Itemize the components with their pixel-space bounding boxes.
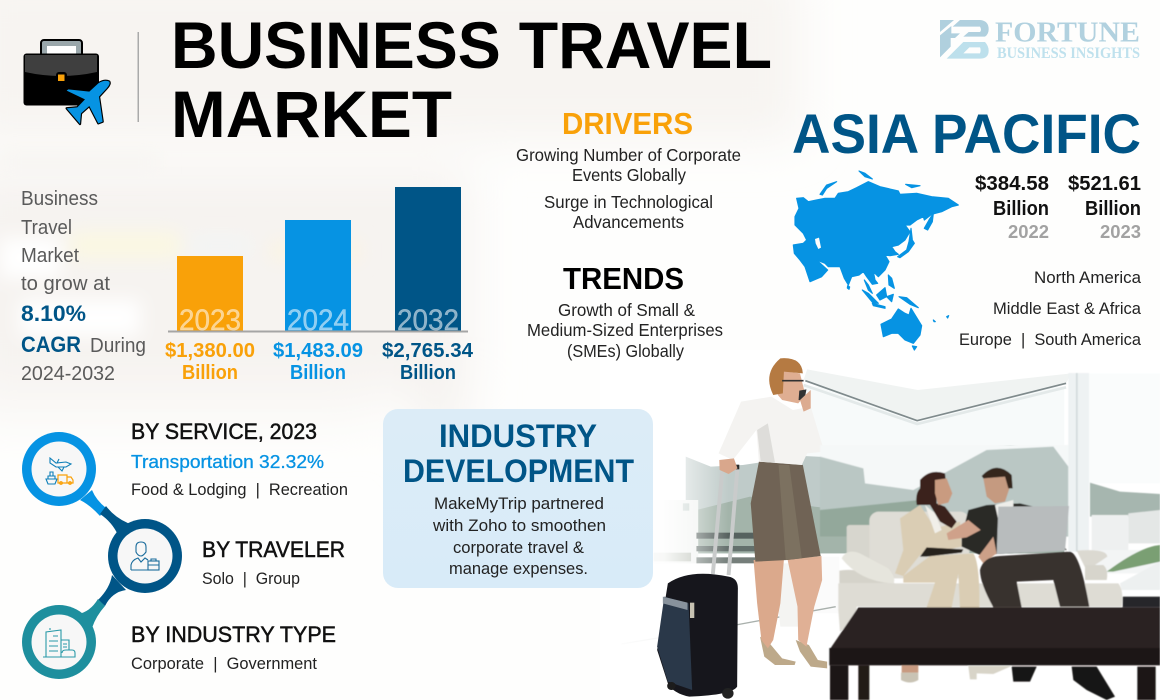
title: BUSINESS TRAVEL [171, 8, 772, 82]
stat 2022 [975, 173, 1049, 242]
icon: traveler [108, 519, 182, 593]
CAGR text block: Travel [21, 217, 72, 239]
bar chart: market size [165, 187, 474, 384]
other regions list [959, 268, 1142, 349]
heading: trends: TRENDS [563, 261, 684, 296]
segment: by service [22, 419, 348, 506]
body text: manage expenses. [449, 560, 588, 578]
photo: business travellers in a bright lounge [657, 358, 1160, 700]
driver 1 [516, 145, 741, 185]
bar 2032 [382, 187, 474, 384]
CAGR text block [21, 188, 146, 385]
body text: with Zoho to smoothen [432, 517, 606, 535]
driver 1: Growing Number of Corporate [516, 145, 741, 165]
heading: industry development: INDUSTRY [439, 418, 597, 454]
stat 2023: 2023 [1100, 222, 1141, 242]
city and mountain view [664, 445, 1064, 564]
ceiling and window frame [738, 370, 1068, 626]
title [171, 8, 772, 151]
coffee table [829, 607, 1160, 700]
suitcase [657, 465, 739, 699]
stat 2022: $384.58 [975, 173, 1049, 195]
icon: briefcase with plane [24, 40, 110, 124]
bar 2023 [165, 256, 255, 384]
drivers panel [516, 106, 741, 232]
bar 2024: 2024 [287, 304, 349, 337]
CAGR text block: Market [21, 245, 79, 267]
trend text: (SMEs) Globally [567, 341, 684, 361]
other regions list: Middle East & Africa [993, 299, 1142, 318]
stat 2023: $521.61 [1068, 173, 1141, 195]
sub-segments: Solo | Group [202, 569, 300, 588]
other regions list: Europe | South America [959, 330, 1142, 349]
CAGR text block: During [90, 335, 146, 357]
bar 2032: 2032 [397, 304, 459, 337]
heading: by service: BY SERVICE, 2023 [131, 419, 317, 444]
CAGR text block: to grow at [21, 273, 110, 295]
bar 2023: $1,380.00 [165, 340, 255, 362]
title: MARKET [171, 77, 452, 151]
trend text [527, 300, 723, 361]
leading sub-segment: Transportation 32.32% [131, 451, 324, 472]
bar 2024: Billion [290, 362, 346, 384]
trends panel [527, 261, 723, 361]
body text: MakeMyTrip partnered [434, 495, 604, 513]
segment: by traveler [108, 519, 345, 593]
sub-segments: Food & Lodging | Recreation [131, 480, 348, 499]
CAGR text block: CAGR [21, 332, 81, 357]
divider [138, 32, 139, 122]
mountain and city view [820, 373, 1160, 607]
window view, frame and standing traveller [657, 358, 1068, 699]
segment: by industry type [22, 605, 336, 679]
seated woman [895, 472, 979, 608]
couple on sofa with coffee table [820, 373, 1160, 700]
CAGR text block: 2024-2032 [21, 363, 115, 385]
sofa [838, 512, 1122, 632]
bar 2032: Billion [400, 362, 456, 384]
bar 2024: $1,483.09 [273, 340, 363, 362]
heading: by industry type: BY INDUSTRY TYPE [131, 622, 336, 647]
bar 2023: Billion [182, 362, 238, 384]
trend text: Medium-Sized Enterprises [527, 320, 723, 340]
logo: Fortune Business Insights: BUSINESS INSIGHTS [997, 45, 1140, 62]
connector chain between segment circles [78, 490, 130, 628]
heading: industry development: DEVELOPMENT [403, 453, 634, 489]
body text [432, 495, 606, 578]
other regions list: North America [1034, 268, 1142, 287]
panel: industry development [383, 409, 653, 588]
trend text: Growth of Small & [558, 300, 695, 320]
bar 2024 [273, 220, 363, 384]
driver 2 [544, 192, 713, 232]
region heading: Asia Pacific: ASIA PACIFIC [792, 102, 1141, 165]
icon: office building [22, 605, 96, 679]
logo mark [940, 20, 989, 59]
bar 2032: $2,765.34 [382, 340, 474, 362]
fade of view toward page [621, 456, 726, 645]
CAGR text block: 8.10% [21, 301, 86, 326]
heading: industry development [403, 418, 634, 489]
icon: transport [22, 432, 96, 506]
driver 1: Events Globally [572, 165, 686, 185]
stat 2023: Billion [1085, 198, 1141, 220]
stat 2023 [1068, 173, 1141, 242]
logo: Fortune Business Insights [940, 16, 1140, 62]
heading: drivers: DRIVERS [562, 106, 693, 141]
map: Asia Pacific [793, 171, 958, 350]
driver 2: Advancements [573, 212, 684, 232]
seated man with laptop [947, 468, 1089, 607]
stats: Asia Pacific market size [975, 173, 1141, 242]
sub-segments: Corporate | Government [131, 654, 317, 673]
CAGR text block: Business [21, 188, 98, 210]
standing woman with phone [719, 358, 827, 668]
logo: Fortune Business Insights: FORTUNE [995, 16, 1140, 48]
body text: corporate travel & [453, 539, 584, 557]
driver 2: Surge in Technological [544, 192, 713, 212]
heading: by traveler: BY TRAVELER [202, 537, 345, 562]
stat 2022: Billion [993, 198, 1049, 220]
stat 2022: 2022 [1008, 222, 1049, 242]
bar 2023: 2023 [179, 304, 241, 337]
